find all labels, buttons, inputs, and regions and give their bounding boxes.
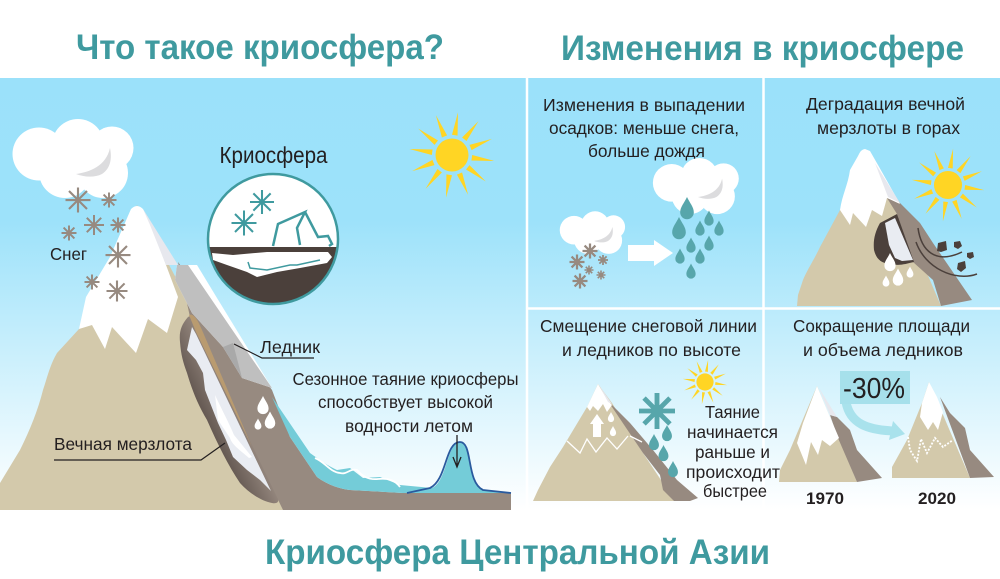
icon: snowflakes — [62, 188, 130, 302]
icon: cryosphere circle — [208, 174, 338, 304]
label: 1970: 1970 — [806, 489, 844, 508]
label: glacier — [234, 337, 320, 358]
ice — [187, 327, 271, 491]
melt drops — [255, 396, 275, 430]
glacier — [175, 265, 272, 388]
melt text: Таяние — [705, 402, 760, 422]
panel text: Изменения в выпадении — [543, 95, 745, 115]
exposed permafrost — [874, 214, 914, 265]
snow cap — [79, 206, 178, 353]
teal drops — [649, 425, 678, 477]
icon: main sun — [409, 112, 495, 198]
sun — [683, 360, 727, 404]
panel text: Сокращение площади — [793, 316, 970, 336]
small snowflakes — [570, 244, 608, 288]
panel: snow line shift — [533, 316, 780, 501]
panel text: и ледников по высоте — [562, 340, 741, 360]
panel text — [540, 316, 757, 360]
label: permafrost: Вечная мерзлота — [54, 434, 192, 454]
mountain — [533, 384, 674, 501]
panel: main mountain illustration — [0, 205, 511, 510]
panel text: мерзлоты в горах — [817, 118, 960, 138]
label: permafrost — [54, 434, 225, 460]
text: seasonal melt: способствует высокой — [318, 392, 493, 412]
taupe slope — [178, 262, 511, 510]
label: snow: Снег — [50, 244, 87, 264]
drops — [608, 412, 616, 436]
permafrost section — [180, 316, 278, 503]
melt text: начинается — [687, 422, 778, 442]
panel text: осадков: меньше снега, — [549, 118, 739, 138]
title: changes in the cryosphere: Изменения в криосфере — [561, 29, 964, 68]
text: seasonal melt: Сезонное таяние криосферы — [292, 369, 518, 389]
foam — [315, 458, 400, 487]
mountain — [797, 149, 941, 306]
title: what is the cryosphere: Что такое криосфера? — [76, 28, 444, 67]
melt text — [686, 402, 780, 501]
melt text: происходит — [686, 462, 780, 482]
panel text: Смещение снеговой линии — [540, 316, 757, 336]
text: seasonal melt — [292, 369, 518, 436]
icon: cloud — [12, 119, 134, 198]
hydrograph line — [407, 442, 511, 493]
title: cryosphere of Central Asia: Криосфера Центральной Азии — [265, 533, 770, 572]
sun — [911, 148, 985, 222]
rain drops — [672, 197, 724, 279]
label: 2020: 2020 — [918, 489, 956, 508]
arrow: peak flow — [453, 435, 461, 467]
callout: -30%: -30% — [843, 373, 905, 405]
panel text: Деградация вечной — [806, 94, 965, 114]
mountain 2020 — [892, 382, 994, 478]
meltwater — [272, 397, 511, 493]
falling rocks — [916, 228, 977, 276]
panel text: больше дождя — [588, 141, 705, 161]
arrow — [628, 240, 673, 266]
up arrow — [590, 414, 604, 437]
melt text: раньше и — [695, 442, 770, 462]
panel text — [806, 94, 965, 138]
panel: permafrost degradation — [797, 94, 985, 306]
panel: glacier shrinkage — [779, 316, 994, 508]
big cloud — [653, 158, 739, 214]
arrow: decline — [846, 402, 905, 440]
label: glacier: Ледник — [260, 337, 320, 357]
text: seasonal melt: водности летом — [345, 416, 473, 436]
background: sky panels — [0, 78, 1000, 510]
panel text — [793, 316, 970, 360]
panel text: и объема ледников — [803, 340, 963, 360]
melt text: быстрее — [703, 481, 767, 501]
teal snowflake — [639, 393, 675, 429]
label: cryosphere: Криосфера — [220, 142, 328, 168]
mountain 1970 — [779, 386, 882, 482]
small cloud — [560, 211, 625, 254]
snow line — [567, 436, 642, 453]
panel text — [543, 95, 745, 161]
mountain body — [0, 205, 300, 510]
panel: precipitation change — [543, 95, 745, 288]
tan edge — [189, 315, 252, 447]
drops — [883, 253, 913, 287]
